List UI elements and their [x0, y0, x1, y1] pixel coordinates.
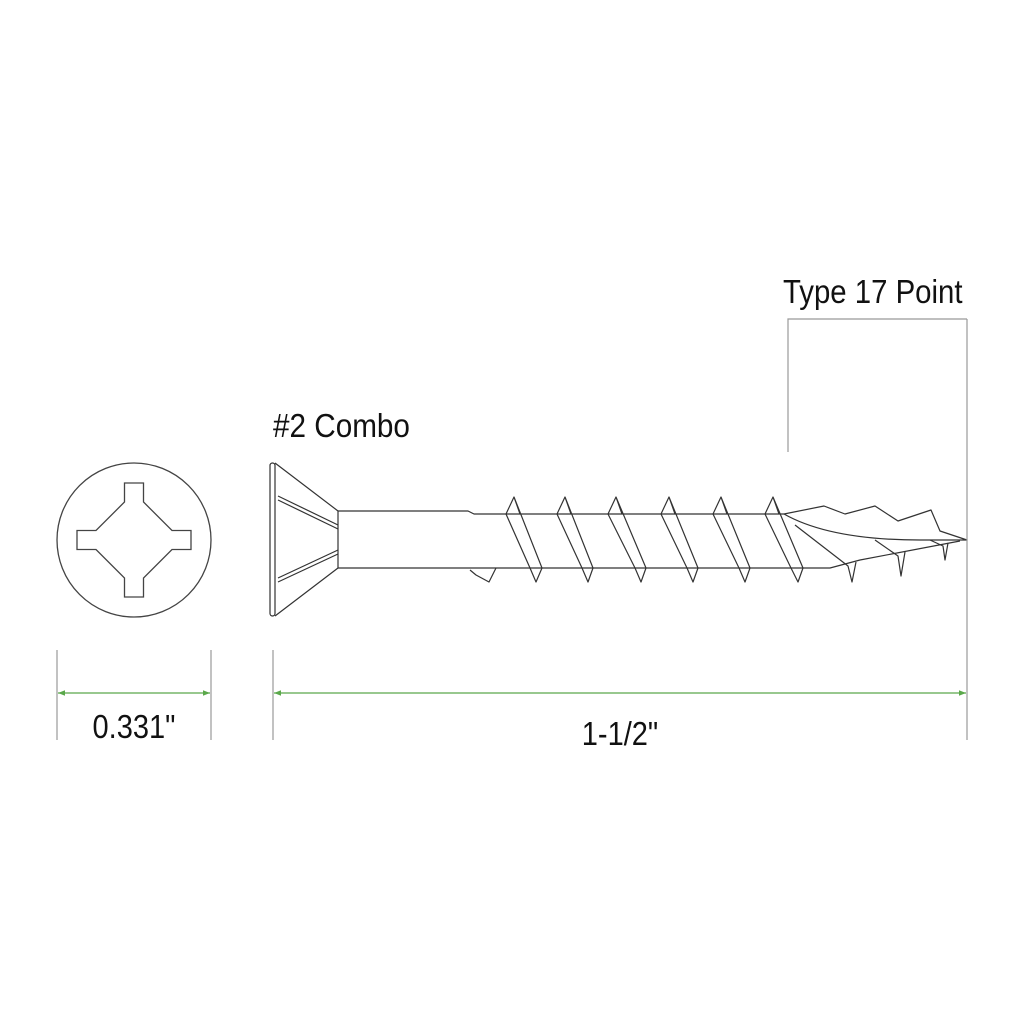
label: Type 17 Point with bracket: [783, 273, 967, 452]
dimension: length: 1-1/2": [582, 715, 658, 752]
label: Type 17 Point with bracket: Type 17 Point: [783, 273, 963, 310]
icon: screw head top view: [57, 463, 211, 617]
dimension: head diameter: 0.331": [93, 708, 175, 745]
screw side view: [270, 463, 967, 616]
threads: [506, 497, 542, 582]
label: #2 Combo: #2 Combo: [273, 408, 410, 444]
